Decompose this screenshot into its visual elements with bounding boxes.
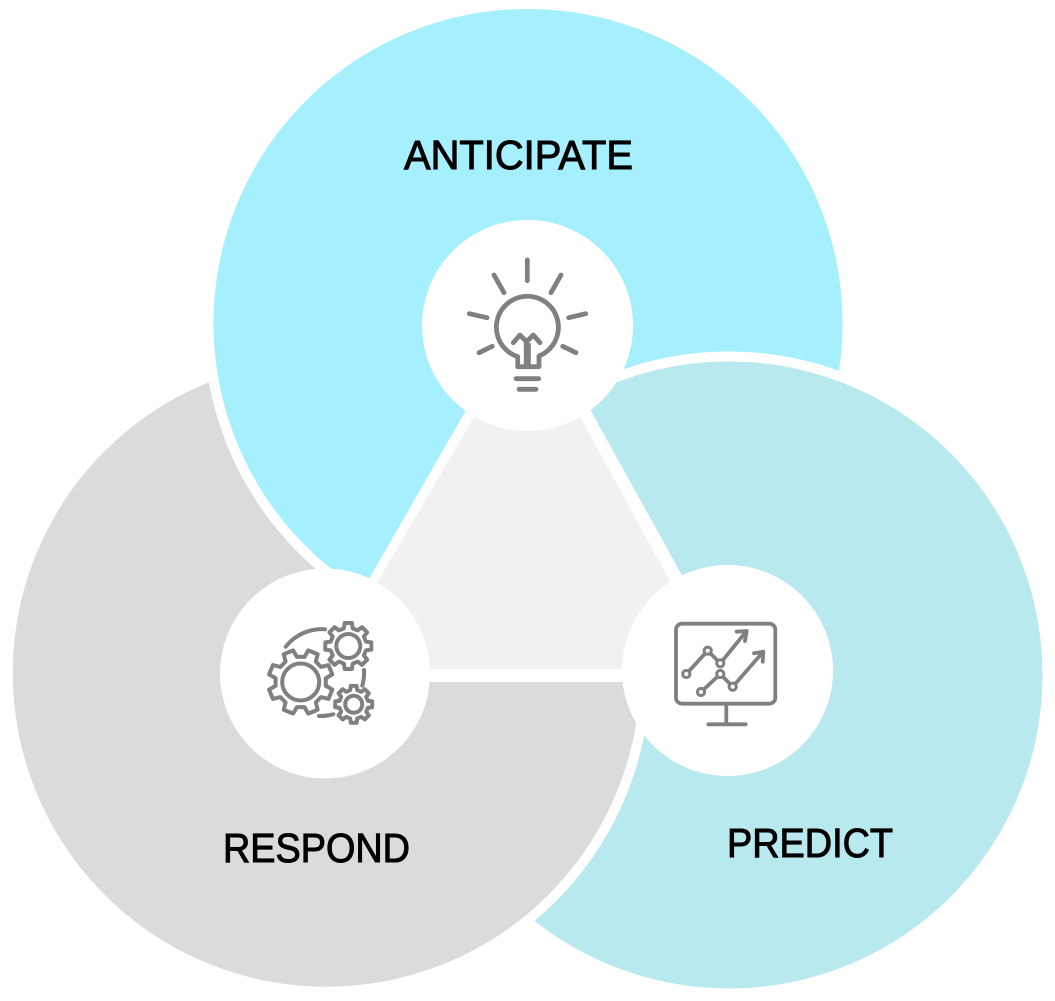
centre triangle — [310, 300, 741, 682]
label: predict: PREDICT — [727, 820, 893, 866]
circle: predict overlap over anticipate — [590, 352, 1032, 596]
icon disc: respond — [220, 568, 430, 778]
circle: predict — [416, 362, 1042, 988]
icon: light bulb — [469, 260, 586, 389]
label: respond: RESPOND — [223, 825, 410, 871]
circle: anticipate — [208, 4, 848, 643]
icon disc: anticipate — [422, 220, 633, 431]
icon: gears — [259, 623, 372, 724]
icon disc: predict — [622, 565, 833, 776]
icon: monitor with rising charts — [676, 624, 775, 724]
circle: respond — [8, 354, 645, 992]
label: anticipate: ANTICIPATE — [404, 132, 633, 178]
